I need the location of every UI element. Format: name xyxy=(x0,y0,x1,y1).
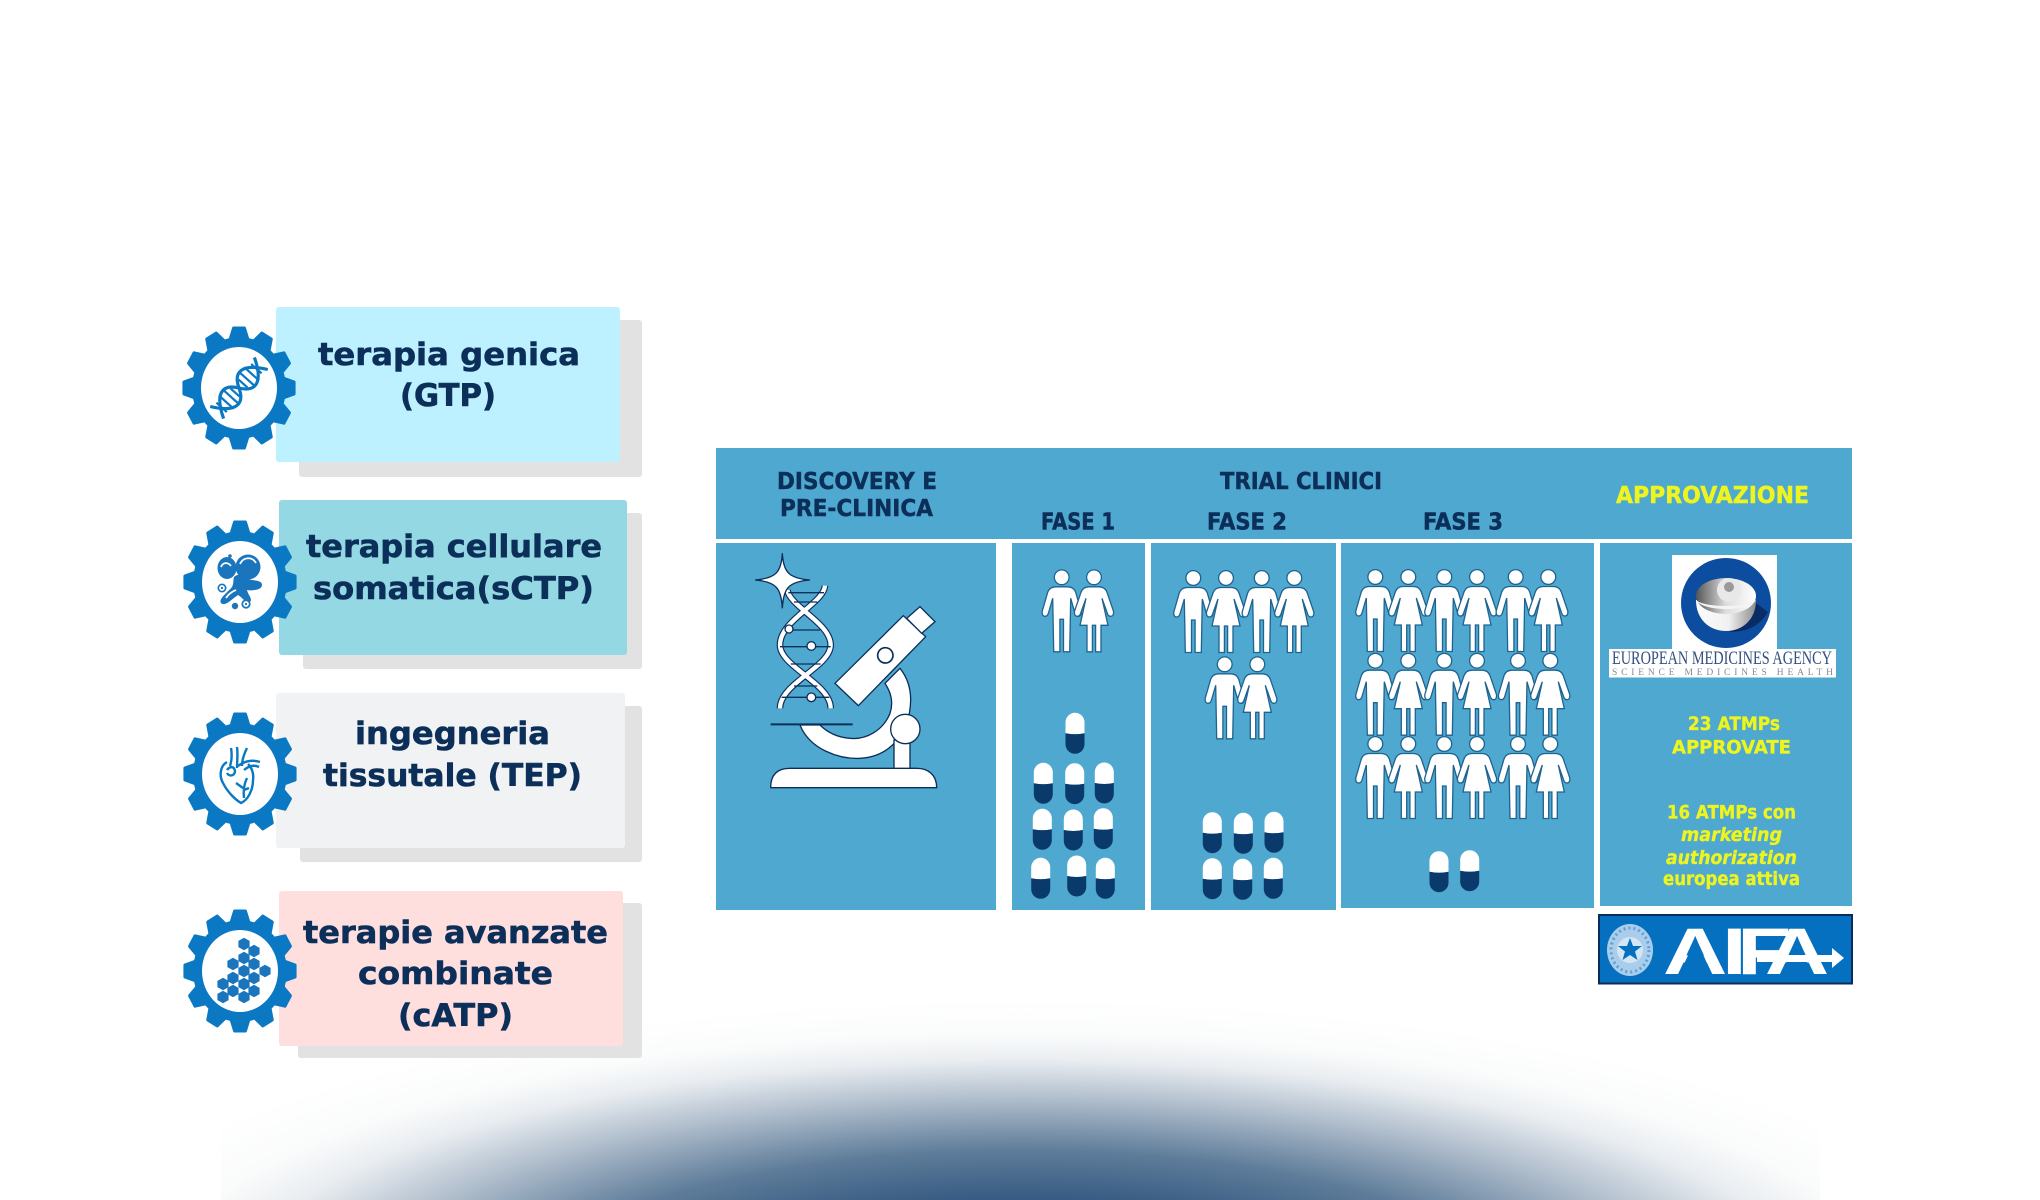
background glow xyxy=(221,960,1820,1200)
panel: fase 2 xyxy=(1151,543,1336,910)
heading: fase 3: FASE 3 xyxy=(1423,508,1503,536)
text: 23 ATMPs approvate: 23 ATMPs xyxy=(1688,713,1780,735)
text: terapia cellulare: somatica(sCTP) xyxy=(313,571,594,607)
text: 16 ATMPs con marketing authorization xyxy=(1663,802,1800,890)
heading: approvazione: APPROVAZIONE xyxy=(1616,481,1809,509)
text: terapia genica: terapia genica xyxy=(318,337,580,373)
text: terapia genica: (GTP) xyxy=(400,378,496,414)
panel: fase 1 xyxy=(1012,543,1145,910)
text: 16 ATMPs con marketing authorization: marketing xyxy=(1681,824,1782,846)
heading: trial clinici: TRIAL CLINICI xyxy=(1220,467,1382,495)
panel: ingegneria tissutale xyxy=(185,693,642,862)
icon: gear with DNA xyxy=(184,328,294,448)
icon: capsules fase 2 xyxy=(1203,812,1284,900)
text: terapia genica xyxy=(318,337,580,414)
text: 23 ATMPs approvate: APPROVATE xyxy=(1672,736,1791,758)
text: 16 ATMPs con marketing authorization: 16 ATMPs con xyxy=(1667,802,1796,824)
heading: fase 1: FASE 1 xyxy=(1041,508,1115,536)
heading: discovery: PRE-CLINICA xyxy=(780,494,934,522)
heading: discovery: DISCOVERY E xyxy=(777,467,937,495)
text: ingegneria tissutale: tissutale (TEP) xyxy=(323,758,582,794)
icon: patients fase 1 xyxy=(1042,570,1114,652)
panel: header band xyxy=(716,448,1852,539)
heading: fase 2: FASE 2 xyxy=(1207,508,1287,536)
icon: capsules fase 3 xyxy=(1430,850,1479,892)
icon: European Medicines Agency logo xyxy=(1609,555,1836,678)
icon: gear with cells xyxy=(185,522,295,642)
text: 16 ATMPs con marketing authorization: europea attiva xyxy=(1663,868,1800,890)
text: 23 ATMPs approvate xyxy=(1672,713,1791,758)
heading: discovery xyxy=(777,467,937,522)
text: ingegneria tissutale: ingegneria xyxy=(355,716,550,752)
text: ingegneria tissutale xyxy=(323,716,582,794)
icon: European Medicines Agency logo: EUROPEAN MEDICINES AGENCY xyxy=(1612,648,1832,669)
icon: patients fase 3 xyxy=(1356,570,1570,818)
icon: European Medicines Agency logo: SCIENCE MEDICINES HEALTH xyxy=(1612,668,1833,678)
panel: terapie avanzate combinate xyxy=(185,891,642,1058)
text: terapia cellulare: terapia cellulare xyxy=(306,529,602,565)
icon: capsules fase 1 xyxy=(1031,713,1115,899)
icon: patients fase 2 xyxy=(1174,571,1314,739)
panel: approvazione xyxy=(1600,543,1852,906)
panel: terapia genica xyxy=(184,307,642,477)
text: terapia cellulare xyxy=(306,529,602,607)
text: terapie avanzate: (cATP) xyxy=(398,998,513,1034)
text: terapie avanzate: combinate xyxy=(358,956,553,992)
panel: terapia cellulare somatica xyxy=(185,500,642,669)
text: terapie avanzate xyxy=(303,915,608,1034)
icon: microscope with DNA xyxy=(755,553,937,788)
text: 16 ATMPs con marketing authorization: authorization xyxy=(1666,847,1797,869)
text: terapie avanzate: terapie avanzate xyxy=(303,915,608,951)
panel: fase 3 xyxy=(1341,543,1594,908)
icon: gear with hexagon cluster xyxy=(185,911,295,1031)
icon: AIFA logo: AIFA xyxy=(1663,914,1829,988)
icon: AIFA logo xyxy=(1599,914,1852,988)
panel: discovery e pre-clinica xyxy=(716,543,996,910)
icon: gear with heart xyxy=(185,714,295,834)
